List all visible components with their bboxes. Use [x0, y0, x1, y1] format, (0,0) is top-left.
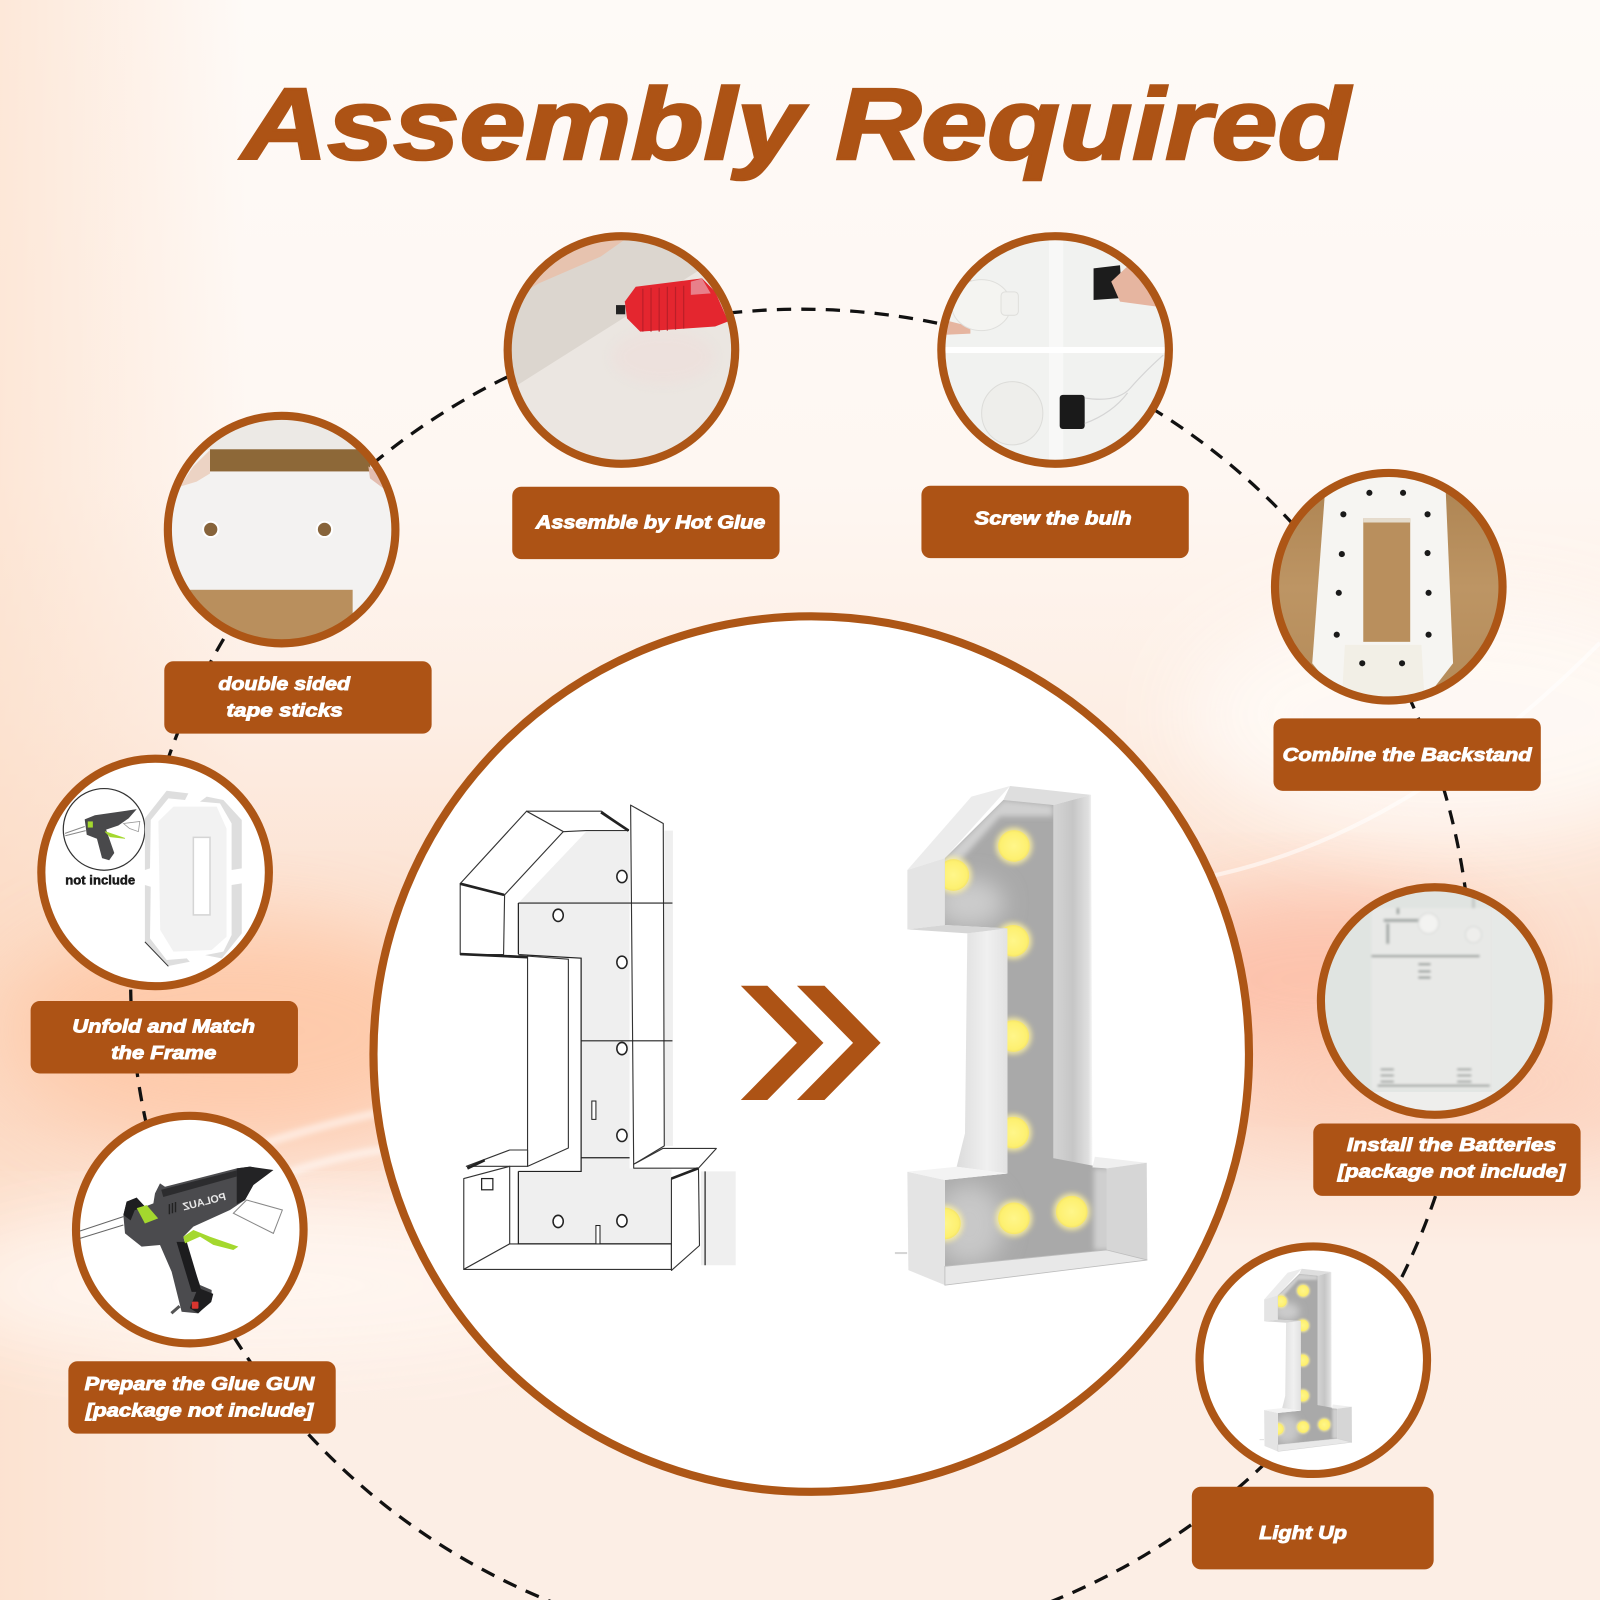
panel: assemble by hot glue photo — [500, 230, 745, 474]
illustration: assembled marquee number one — [895, 786, 1147, 1285]
panel: screw the bulb photo — [934, 230, 1179, 474]
label: double sided tape: tape sticks — [227, 699, 343, 720]
label: screw the bulb — [921, 486, 1189, 558]
inset: glue gun not included — [63, 789, 145, 888]
inset: glue gun not included: not include — [65, 873, 135, 888]
panel: unfold and match photo — [41, 759, 269, 986]
icon: glue gun: POLAUZ — [181, 1191, 227, 1213]
label: prepare the glue gun: Prepare the Glue GUN — [85, 1373, 315, 1394]
panel: double sided tape photo — [161, 408, 402, 653]
arrow: double chevron — [741, 986, 881, 1100]
frame pieces — [145, 791, 242, 966]
label: install the batteries: Install the Batteries — [1347, 1134, 1556, 1155]
label: double sided tape — [164, 661, 432, 734]
label: prepare the glue gun — [68, 1361, 336, 1434]
label: screw the bulb: Screw the bulh — [974, 507, 1132, 528]
label: light up — [1192, 1487, 1434, 1569]
panel: central before and after circle — [373, 616, 1249, 1492]
panel: combine the backstand photo — [1270, 469, 1507, 706]
panel: light up photo — [1199, 1246, 1427, 1474]
label: double sided tape: double sided — [218, 673, 351, 694]
label: assemble by hot glue: Assemble by Hot Glue — [535, 512, 765, 533]
dashed connector ring — [131, 309, 1471, 1600]
title: Assembly Required — [238, 69, 1353, 181]
label: combine the backstand: Combine the Backstand — [1283, 744, 1533, 765]
diagram: unfolded number frame — [460, 805, 736, 1270]
panel: prepare the glue gun photo — [76, 1116, 304, 1343]
illustration: lit mini number one — [1260, 1269, 1352, 1451]
label: prepare the glue gun: [package not include] — [85, 1399, 314, 1420]
icon: glue gun — [80, 1167, 282, 1313]
label: unfold and match: the Frame — [111, 1042, 216, 1063]
panel: install batteries photo — [1316, 884, 1553, 1122]
label: assemble by hot glue — [512, 487, 780, 559]
label: install the batteries — [1313, 1123, 1581, 1196]
label: light up: Light Up — [1259, 1522, 1347, 1543]
label: unfold and match: Unfold and Match — [72, 1016, 255, 1037]
label: unfold and match — [31, 1001, 298, 1073]
label: install the batteries: [package not include] — [1337, 1161, 1566, 1182]
label: combine the backstand — [1273, 718, 1541, 791]
